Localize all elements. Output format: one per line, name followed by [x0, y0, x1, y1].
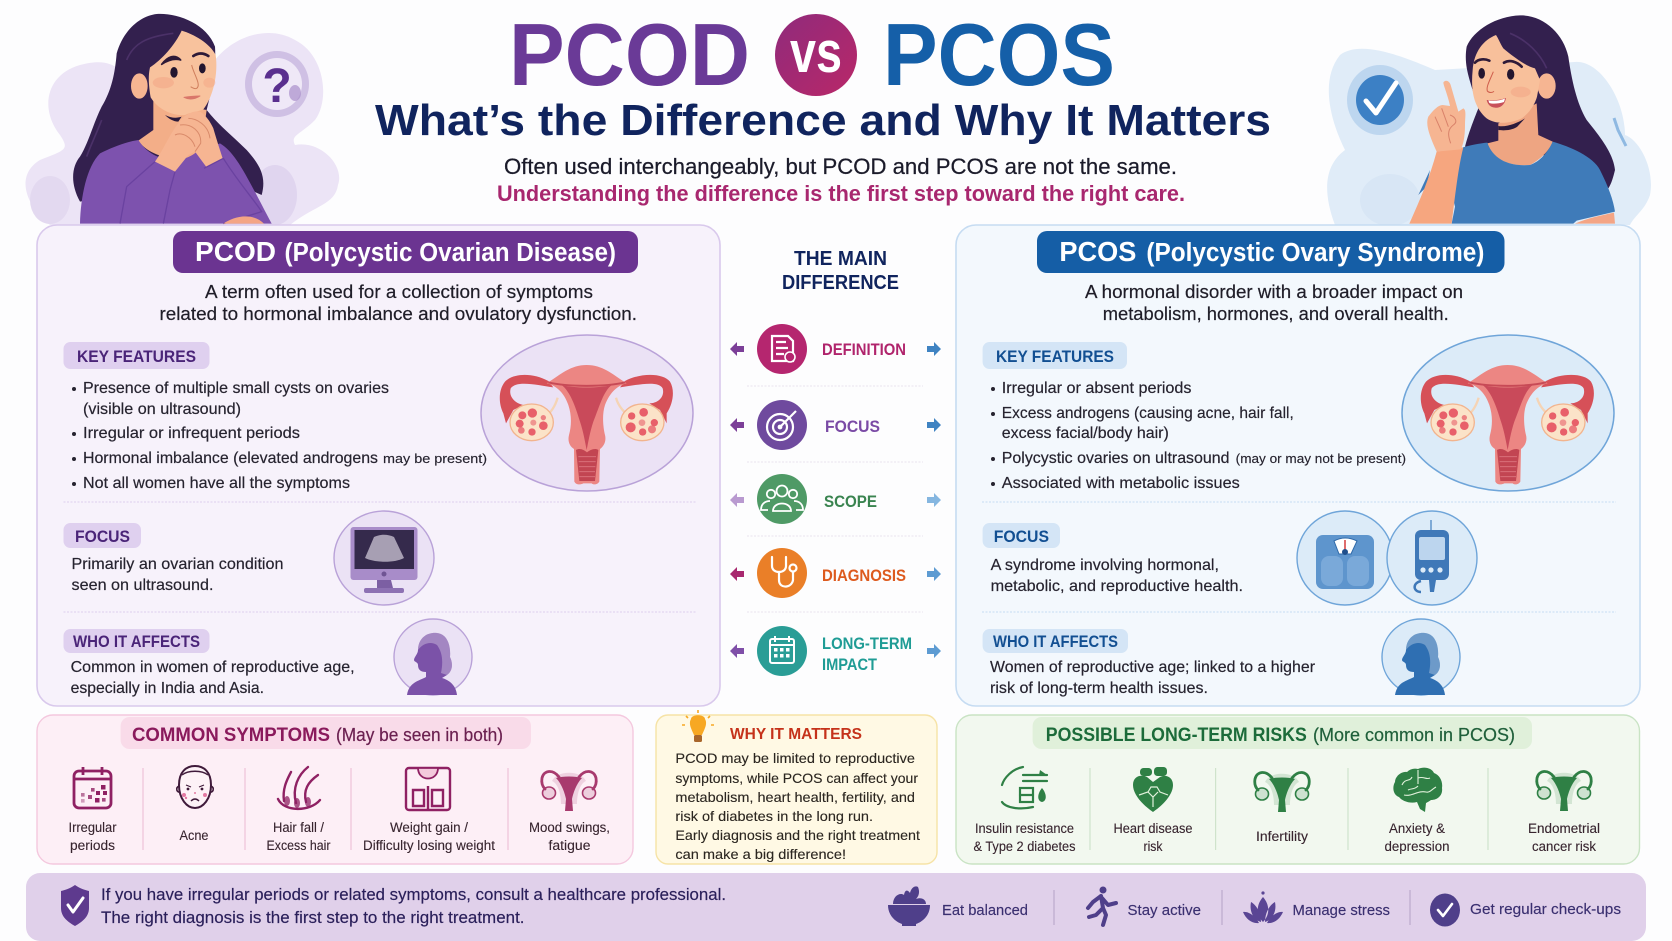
item: irregular periods: [68, 767, 117, 853]
focus text: A syndrome involving hormonal,: [991, 557, 1219, 574]
focus text: seen on ultrasound.: [72, 577, 213, 594]
heading: PCOS: (Polycystic Ovary Syndrome): [1146, 239, 1484, 267]
key features list: [72, 380, 487, 492]
heading: DIFFERENCE: [782, 272, 899, 294]
who it affects text: especially in India and Asia.: [71, 680, 264, 697]
panel: possible long-term risks: [956, 715, 1640, 864]
description: related to hormonal imbalance and ovulatory dysfunction.: [160, 303, 637, 324]
key features label: [983, 342, 1127, 369]
item: endometrial cancer: Endometrial: [1528, 821, 1600, 836]
illustration: woman pointing with check mark: [1327, 15, 1651, 226]
description: [160, 281, 637, 324]
consult message: If you have irregular periods or related symptoms, consult a healthcare professional.: [101, 885, 726, 904]
item: weight gain: Difficulty losing weight: [363, 838, 495, 853]
panel: common symptoms: [37, 715, 633, 864]
key features list: Not all women have all the symptoms: [83, 475, 350, 492]
icon: woman silhouette: [1382, 619, 1460, 695]
consult message: The right diagnosis is the first step to the right treatment.: [101, 908, 524, 927]
item: irregular periods: periods: [70, 838, 115, 853]
item: anxiety and depression: Anxiety &: [1389, 821, 1445, 836]
icon: uterus and ovaries: [1402, 335, 1614, 491]
key features list: Excess androgens (causing acne, hair fall,: [1002, 405, 1294, 422]
row: diagnosis: DIAGNOSIS: [822, 566, 906, 585]
row: focus: [730, 400, 941, 450]
heading: (More common in PCOS): [1313, 725, 1515, 745]
key features label: KEY FEATURES: [77, 347, 196, 366]
row: definition: [730, 324, 941, 374]
focus label: [64, 523, 141, 548]
key features list: excess facial/body hair): [1002, 425, 1169, 442]
key features list: (may or may not be present): [1236, 451, 1406, 466]
heading: PCOS: PCOS: [1059, 236, 1136, 267]
illustration: thinking woman with question mark: ?: [262, 60, 292, 113]
who it affects text: risk of long-term health issues.: [990, 680, 1208, 697]
key features label: KEY FEATURES: [996, 347, 1114, 366]
tip: stay active: [1088, 886, 1201, 925]
focus text: [991, 557, 1243, 595]
who it affects label: WHO IT AFFECTS: [993, 632, 1118, 651]
item: insulin resistance: [974, 767, 1076, 854]
key features list: [991, 380, 1406, 492]
item: anxiety and depression: [1384, 768, 1450, 854]
body text: can make a big difference!: [675, 846, 846, 862]
heading: [1033, 717, 1532, 749]
item: mood swings: fatigue: [548, 838, 590, 853]
key features list: may be present): [383, 451, 487, 466]
icon: weighing scale: [1297, 511, 1393, 605]
who it affects label: WHO IT AFFECTS: [73, 632, 200, 651]
item: heart disease: risk: [1144, 839, 1163, 854]
item: irregular periods: Irregular: [68, 820, 117, 835]
intro text: Understanding the difference is the first step toward the right care.: [497, 181, 1185, 206]
key features list: Polycystic ovaries on ultrasound: [1002, 450, 1230, 467]
tip: stay active: Stay active: [1128, 902, 1201, 919]
item: infertility: Infertility: [1256, 829, 1308, 844]
row: scope: SCOPE: [824, 492, 877, 511]
focus text: [72, 556, 284, 594]
description: A hormonal disorder with a broader impact on: [1085, 281, 1463, 302]
consult message: [101, 885, 726, 927]
title: PCOD vs PCOS: vs: [790, 20, 842, 85]
intro text: Often used interchangeably, but PCOD and PCOS are not the same.: [504, 154, 1177, 179]
key features label: [64, 342, 210, 369]
focus text: metabolic, and reproductive health.: [991, 578, 1243, 595]
tip: eat balanced: Eat balanced: [942, 902, 1028, 919]
icon: woman silhouette: [394, 619, 472, 695]
row: long-term impact: LONG-TERM: [822, 634, 912, 653]
panel: why it matters: [656, 710, 937, 864]
panel: the main difference: [730, 248, 941, 676]
body text: symptoms, while PCOS can affect your: [675, 770, 918, 786]
item: heart disease: [1114, 767, 1192, 854]
icon: glucose meter: [1387, 511, 1477, 605]
item: endometrial cancer: cancer risk: [1532, 839, 1596, 854]
body text: risk of diabetes in the long run.: [675, 808, 873, 824]
row: diagnosis: [730, 548, 941, 598]
focus label: [983, 523, 1060, 548]
tip: manage stress: [1243, 891, 1390, 923]
title: PCOD vs PCOS: PCOD: [509, 5, 750, 104]
footer band: [26, 873, 1646, 941]
body text: PCOD may be limited to reproductive: [675, 750, 915, 766]
heading: PCOD: [173, 231, 638, 273]
tip: regular check-ups: Get regular check-ups: [1470, 901, 1621, 918]
tip: eat balanced: [888, 886, 1028, 926]
item: insulin resistance: Insulin resistance: [975, 821, 1074, 836]
item: mood swings: [529, 771, 610, 853]
subtitle: What’s the Difference and Why It Matters: [375, 96, 1271, 145]
tip: manage stress: Manage stress: [1292, 902, 1390, 919]
body text: metabolism, heart health, fertility, and: [675, 789, 915, 805]
item: weight gain: Weight gain /: [390, 820, 468, 835]
item: hair fall: Hair fall /: [273, 820, 324, 835]
who it affects text: [990, 659, 1316, 697]
item: hair fall: Excess hair: [266, 838, 331, 853]
item: endometrial cancer: [1528, 771, 1600, 854]
key features list: Irregular or infrequent periods: [83, 425, 300, 442]
heading: (May be seen in both): [336, 725, 503, 745]
title: PCOD vs PCOS: PCOS: [883, 5, 1115, 104]
tip: regular check-ups: [1430, 894, 1621, 926]
item: anxiety and depression: depression: [1384, 839, 1450, 854]
key features list: Associated with metabolic issues: [1002, 475, 1240, 492]
body text: [675, 750, 920, 862]
description: A term often used for a collection of symptoms: [205, 281, 593, 302]
heading: PCOS: [1037, 231, 1504, 273]
row: focus: FOCUS: [825, 417, 880, 436]
heading: [121, 717, 531, 749]
illustration: thinking woman with question mark: [26, 14, 339, 225]
description: metabolism, hormones, and overall health.: [1103, 303, 1449, 324]
body text: Early diagnosis and the right treatment: [675, 827, 920, 843]
who it affects text: [71, 659, 355, 697]
heading: PCOD: PCOD: [195, 236, 276, 267]
heading: POSSIBLE LONG-TERM RISKS: [1046, 725, 1307, 746]
item: weight gain: [363, 768, 495, 853]
heading: [782, 248, 899, 294]
icon: shield: [61, 885, 89, 926]
item: mood swings: Mood swings,: [529, 820, 610, 835]
panel: PCOS: [956, 225, 1640, 706]
row: long-term impact: IMPACT: [822, 655, 878, 674]
focus label: FOCUS: [994, 527, 1049, 546]
title: PCOD vs PCOS: [509, 5, 1115, 104]
row: scope: [730, 474, 941, 524]
key features list: (visible on ultrasound): [83, 401, 241, 418]
row: definition: DEFINITION: [822, 340, 906, 359]
heading: PCOD: (Polycystic Ovarian Disease): [284, 239, 616, 267]
heading: THE MAIN: [794, 248, 887, 270]
item: hair fall: [266, 767, 331, 853]
focus label: FOCUS: [75, 527, 130, 546]
heading: COMMON SYMPTOMS: [132, 725, 330, 746]
panel: PCOD: [37, 225, 720, 706]
icon: uterus and ovaries: [481, 335, 693, 491]
item: heart disease: Heart disease: [1114, 821, 1192, 836]
who it affects text: Women of reproductive age; linked to a higher: [990, 659, 1316, 676]
description: [1085, 281, 1463, 324]
row: long-term impact: [730, 626, 941, 676]
icon: light bulb: [682, 710, 714, 742]
intro text: [497, 154, 1185, 206]
item: acne: Acne: [180, 828, 208, 843]
key features list: Hormonal imbalance (elevated androgens: [83, 450, 378, 467]
icon: ultrasound monitor: [334, 511, 434, 605]
item: acne: [177, 766, 213, 843]
who it affects text: Common in women of reproductive age,: [71, 659, 355, 676]
key features list: Irregular or absent periods: [1002, 380, 1192, 397]
key features list: Presence of multiple small cysts on ovaries: [83, 380, 389, 397]
item: infertility: [1255, 772, 1309, 844]
heading: WHY IT MATTERS: [730, 726, 862, 743]
item: insulin resistance: & Type 2 diabetes: [974, 839, 1076, 854]
focus text: Primarily an ovarian condition: [72, 556, 284, 573]
